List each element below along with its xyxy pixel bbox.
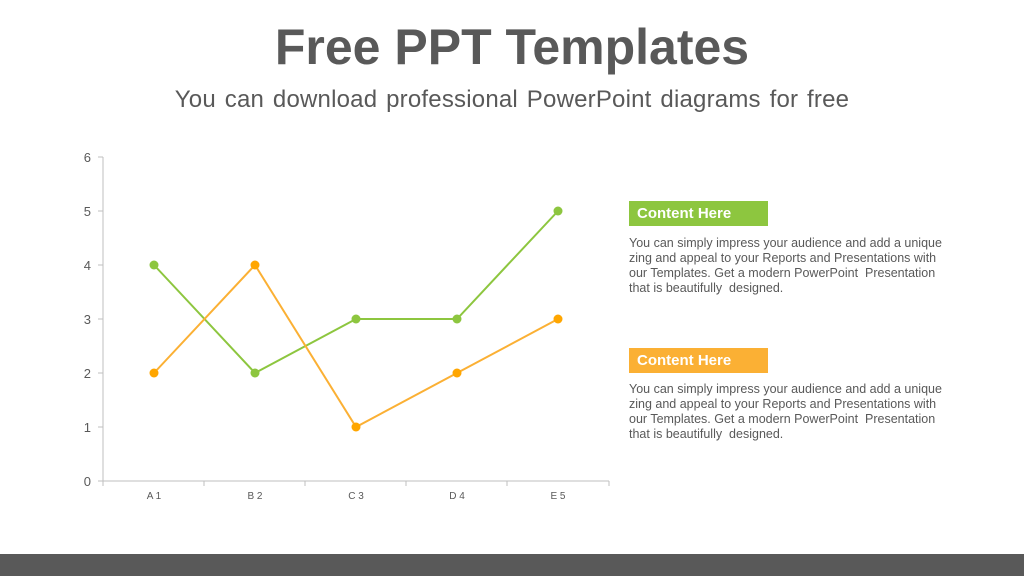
text block 2 <box>629 382 942 441</box>
text block 2: zing and appeal to your Reports and Presentations with <box>629 397 936 411</box>
line chart: 3 <box>84 312 91 327</box>
label: green content <box>629 201 768 226</box>
line chart: C 3 <box>348 491 364 502</box>
text block 2: our Templates. Get a modern PowerPoint Presentation <box>629 412 935 426</box>
text block 1 <box>629 236 942 295</box>
label: orange content: Content Here <box>637 352 731 369</box>
line chart: 5 <box>84 204 91 219</box>
line chart: 0 <box>84 474 91 489</box>
title: Free PPT Templates <box>275 19 749 75</box>
subtitle: You can download professional PowerPoint diagrams for free <box>175 86 849 113</box>
line chart: D 4 <box>449 491 465 502</box>
label: orange content <box>629 348 768 373</box>
series: orange <box>150 260 562 432</box>
text block 1: zing and appeal to your Reports and Presentations with <box>629 251 936 265</box>
text block 1: that is beautifully designed. <box>629 281 783 295</box>
footer bar <box>0 554 1024 576</box>
line chart: 4 <box>84 258 91 273</box>
text block 1: You can simply impress your audience and add a unique <box>629 236 942 250</box>
line chart: E 5 <box>550 491 566 502</box>
series: green <box>150 206 562 378</box>
line chart: 2 <box>84 366 91 381</box>
line chart: 6 <box>84 150 91 165</box>
text block 1: our Templates. Get a modern PowerPoint Presentation <box>629 266 935 280</box>
text block 2: that is beautifully designed. <box>629 427 783 441</box>
line chart: B 2 <box>247 491 263 502</box>
label: green content: Content Here <box>637 205 731 222</box>
line chart: A 1 <box>147 491 162 502</box>
text block 2: You can simply impress your audience and add a unique <box>629 382 942 396</box>
line chart: 1 <box>84 420 91 435</box>
